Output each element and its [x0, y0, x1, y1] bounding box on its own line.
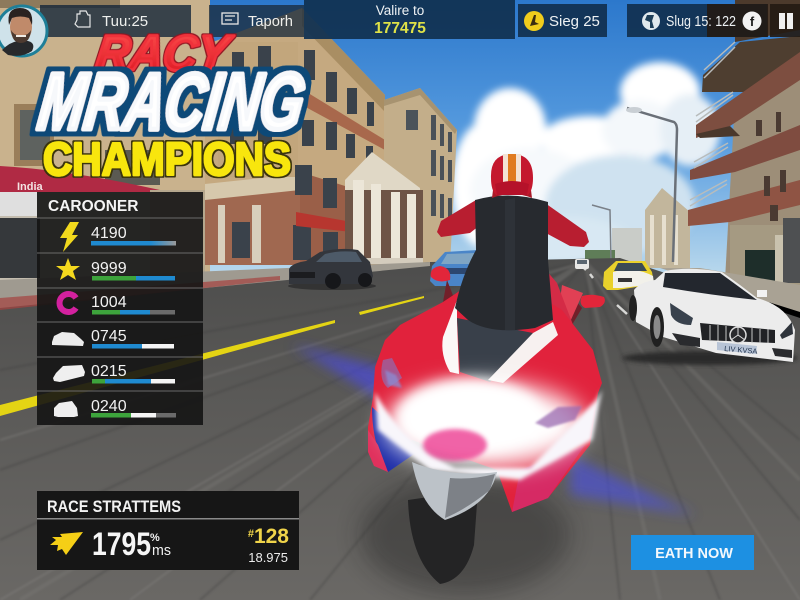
button: Eath now: EATH NOW: [655, 546, 733, 562]
icon: yellow arrow: [50, 532, 83, 555]
title: RACY: RACY: [92, 25, 236, 81]
row: star stat: 9999: [91, 260, 127, 277]
panel: Carooner stats: CAROONER: [48, 198, 138, 215]
white lane dashes: [584, 268, 627, 314]
front tire: [408, 490, 478, 584]
hud bar: Valire to score: 177475: [374, 20, 426, 37]
panel: Carooner stats: [37, 192, 203, 425]
white sports car: [622, 269, 798, 365]
far right buildings and street lamps: [585, 107, 690, 268]
row: coupe stat: [53, 363, 175, 384]
blue car: [430, 250, 478, 286]
rider helmet: [491, 154, 533, 195]
corner building: [384, 88, 457, 265]
yellow car: [603, 261, 654, 290]
hud bar: Slug: Slug 15: 122: [666, 13, 736, 30]
row: coupe stat: 0215: [91, 363, 127, 380]
row: C stat: 1004: [91, 294, 127, 311]
portico columns: [343, 152, 423, 264]
road texture: [0, 262, 800, 600]
vehicle body: [368, 263, 602, 512]
clouds: [452, 62, 720, 264]
title logo: [33, 25, 310, 185]
row: lightning stat: [60, 222, 176, 252]
button: Eath now: [631, 535, 754, 570]
title: MRACING: MRACING: [33, 57, 310, 147]
icon: info button: f: [750, 14, 755, 29]
row: hatchback stat: 0240: [91, 398, 127, 415]
hud bar: Tuu: [40, 5, 191, 37]
distant white car: [575, 259, 589, 269]
row: lightning stat: 4190: [91, 225, 127, 242]
top hud: status bars: [40, 0, 800, 39]
value: 18.975: 18.975: [248, 550, 288, 565]
motion blur glows: [292, 345, 695, 515]
left tan building: [0, 0, 210, 285]
main brick building: [205, 8, 385, 265]
left tan building: India: [17, 181, 44, 193]
white sports car: LIV KVSA: [724, 344, 758, 356]
icon: info button: [742, 12, 762, 30]
value: rank 128: 128: [254, 525, 289, 548]
panel: race strategies: RACE STRATTEMS: [47, 497, 181, 516]
hud bar: Taporh: [209, 5, 304, 37]
row: sedan stat: 0745: [91, 328, 127, 345]
hud bar: Slug: [627, 4, 768, 37]
row: sedan stat: [52, 328, 174, 348]
value: 1795: 1795: [92, 526, 151, 562]
row: hatchback stat: [54, 398, 176, 418]
hud bar: Valire to score: [304, 0, 515, 39]
shadow under vehicle: [360, 475, 570, 595]
black parked car: [288, 249, 376, 290]
headlight glow: [375, 370, 602, 480]
road surface: [0, 258, 800, 600]
unit: percent: %: [150, 532, 160, 544]
rear view mirrors: [431, 266, 605, 325]
hud bar: Tuu: Tuu:25: [102, 13, 148, 30]
player avatar: [0, 6, 47, 56]
icon: pause button: [770, 4, 800, 37]
sidewalks: [0, 262, 800, 312]
row: star stat: [56, 258, 175, 280]
yellow lane markings: [0, 296, 424, 416]
sky background: [0, 0, 800, 290]
hud bar: Valire to score: Valire to: [376, 3, 424, 18]
front fender: [412, 462, 497, 520]
right balcony building: [688, 0, 800, 286]
rider: [437, 182, 589, 330]
hud bar: Sieg: [518, 4, 607, 37]
hud bar: Taporh: Taporh: [248, 13, 293, 30]
hud bar: Sieg: Sieg 25: [549, 13, 600, 30]
unit: ms: ms: [152, 542, 171, 559]
title: CHAMPIONS: CHAMPIONS: [43, 133, 291, 185]
panel: race strategies: [37, 491, 299, 570]
value: rank 128: #: [248, 528, 254, 540]
row: C stat: [60, 294, 175, 314]
